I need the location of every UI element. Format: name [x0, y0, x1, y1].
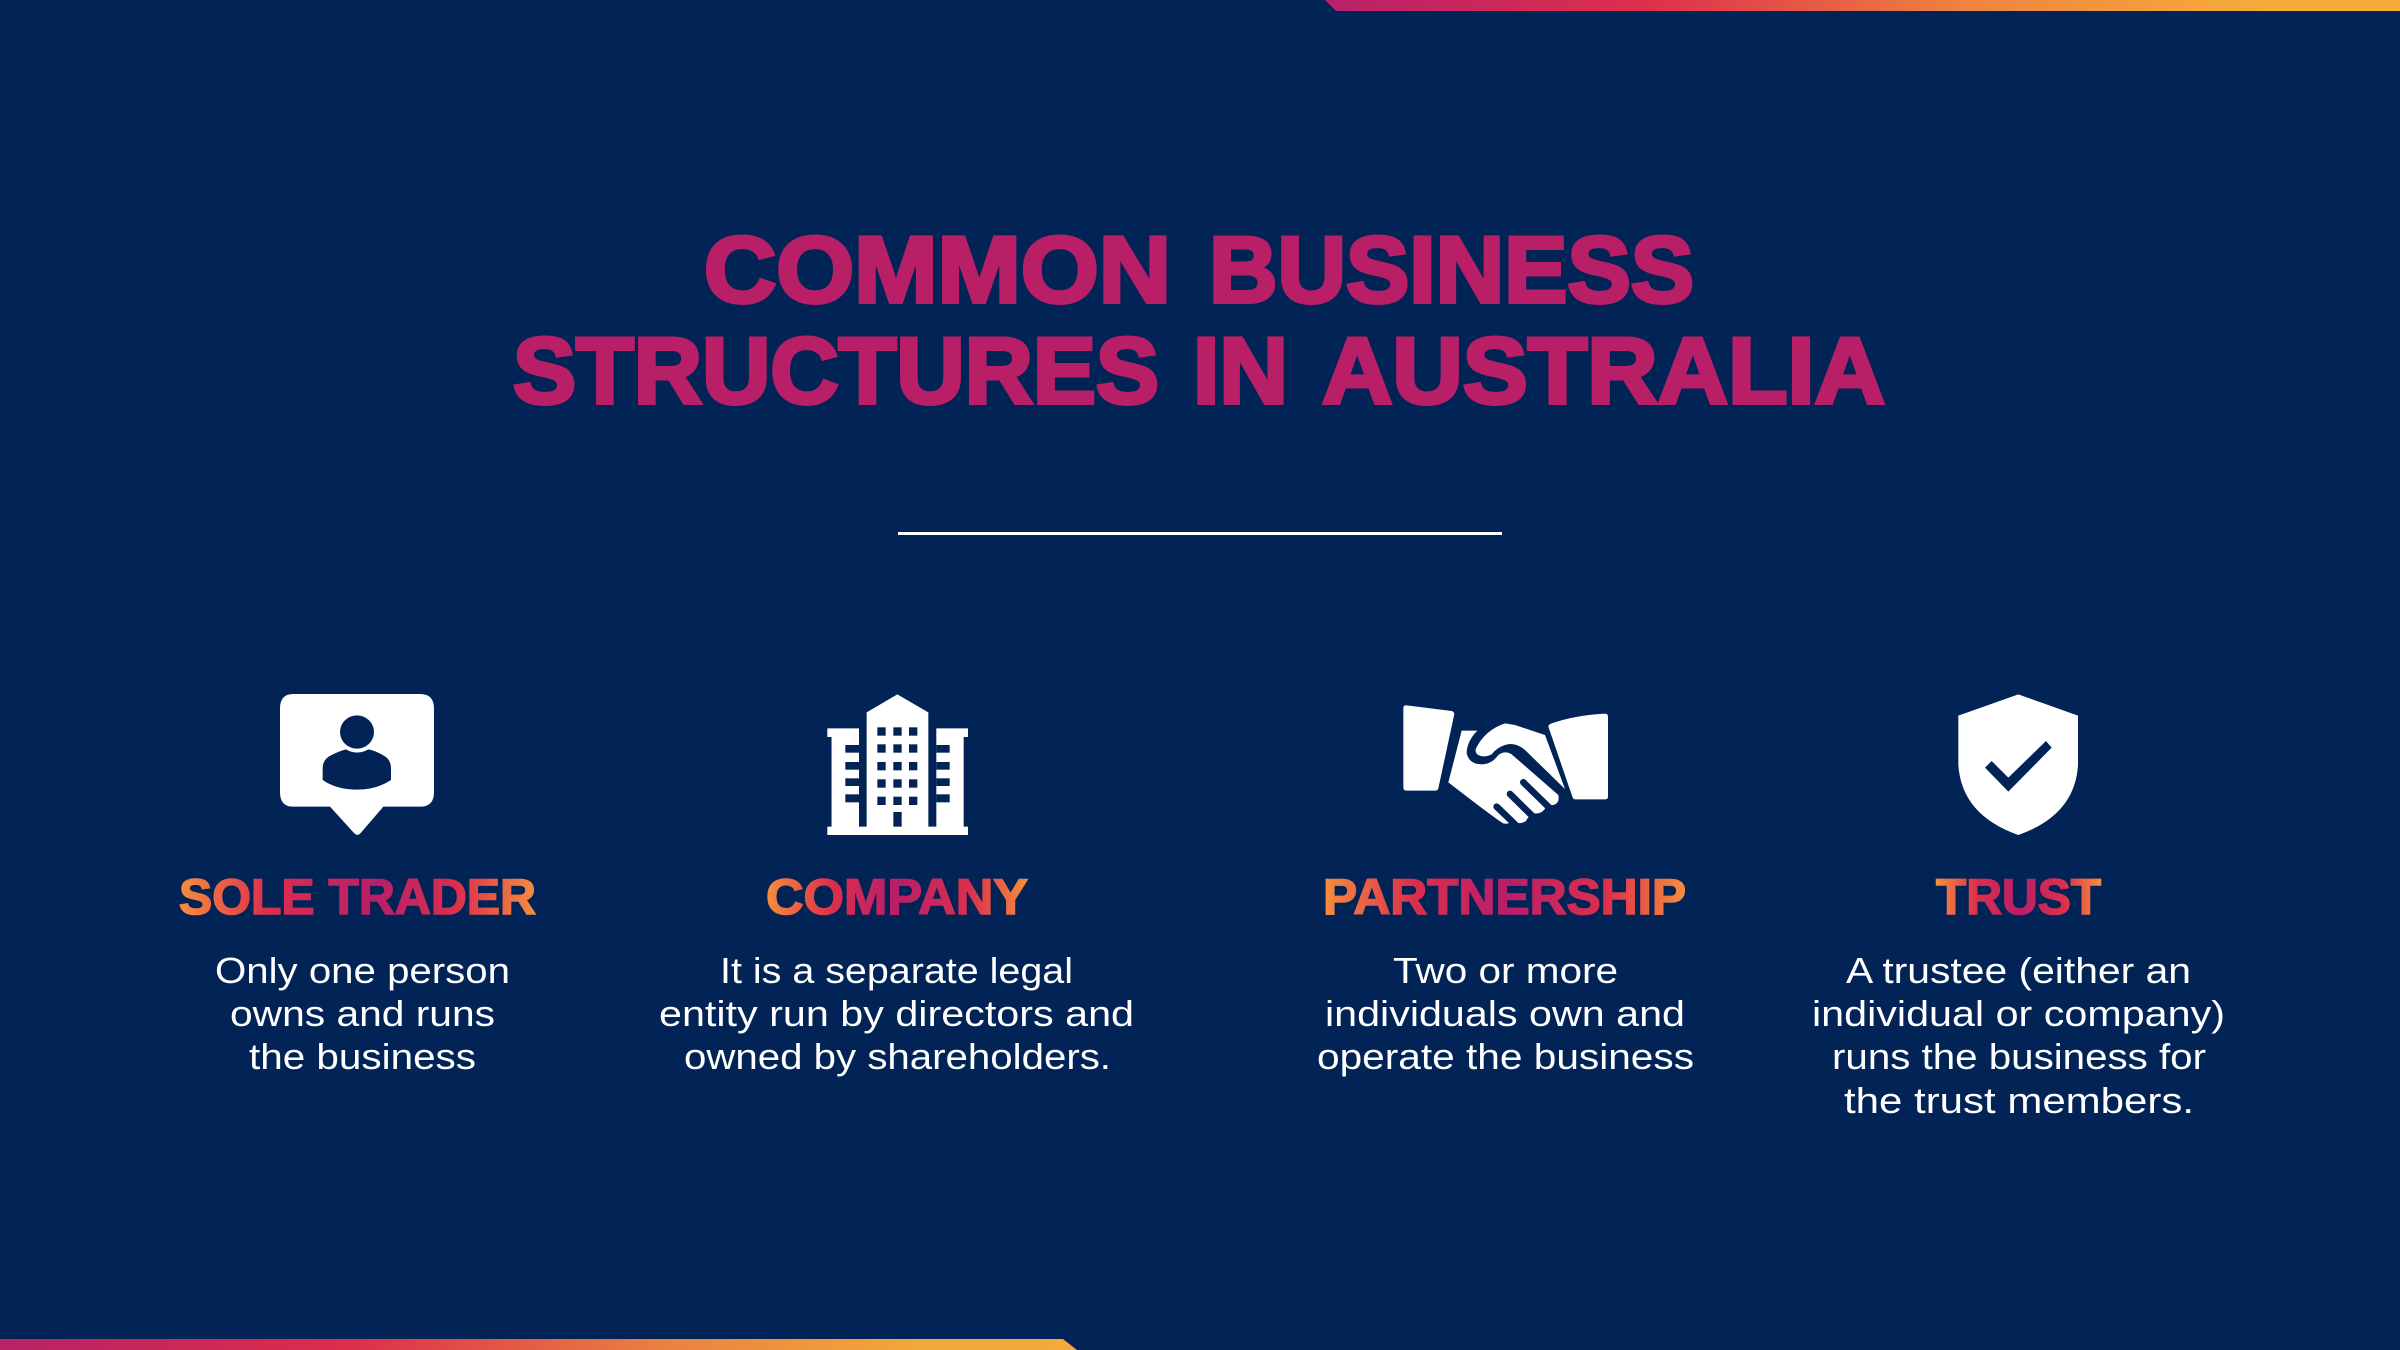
description: trust: individual or company) — [1812, 993, 2225, 1034]
description: partnership — [1317, 950, 1694, 1077]
icon: shield with check — [1958, 694, 2078, 835]
description: sole trader — [215, 950, 510, 1077]
title: AUSTRALIA — [1322, 318, 1885, 423]
description: sole trader: the business — [249, 1036, 476, 1077]
heading: trust: TRUST — [1936, 869, 2101, 925]
heading: company: COMPANY — [766, 869, 1028, 925]
bottom gradient bar — [0, 1339, 1077, 1350]
panel: trust — [1812, 694, 2225, 1121]
description: sole trader: Only one person — [215, 950, 510, 991]
description: partnership: operate the business — [1317, 1036, 1694, 1077]
panel: partnership — [1317, 705, 1694, 1077]
description: trust: the trust members. — [1844, 1080, 2194, 1121]
panel: sole trader — [179, 694, 536, 1077]
description: company: It is a separate legal — [720, 950, 1073, 991]
icon: handshake — [1403, 705, 1608, 827]
title: COMMON — [704, 217, 1171, 322]
description: partnership: individuals own and — [1325, 993, 1685, 1034]
panel: company — [659, 694, 1134, 1077]
description: company: entity run by directors and — [659, 993, 1134, 1034]
description: company — [659, 950, 1134, 1077]
title: IN — [1193, 318, 1288, 423]
icon: office building — [827, 694, 968, 835]
description: trust: runs the business for — [1832, 1036, 2206, 1077]
top gradient bar — [1325, 0, 2400, 11]
title — [513, 217, 1885, 423]
title: BUSINESS — [1209, 217, 1694, 322]
description: company: owned by shareholders. — [684, 1036, 1111, 1077]
title divider — [898, 532, 1502, 535]
description: sole trader: owns and runs — [230, 993, 495, 1034]
title: STRUCTURES — [513, 318, 1159, 423]
description: partnership: Two or more — [1393, 950, 1618, 991]
heading: sole trader: SOLE TRADER — [179, 869, 536, 925]
description: trust — [1812, 950, 2225, 1121]
description: trust: A trustee (either an — [1846, 950, 2191, 991]
icon: person speech bubble — [280, 694, 434, 835]
heading: partnership: PARTNERSHIP — [1323, 869, 1686, 925]
